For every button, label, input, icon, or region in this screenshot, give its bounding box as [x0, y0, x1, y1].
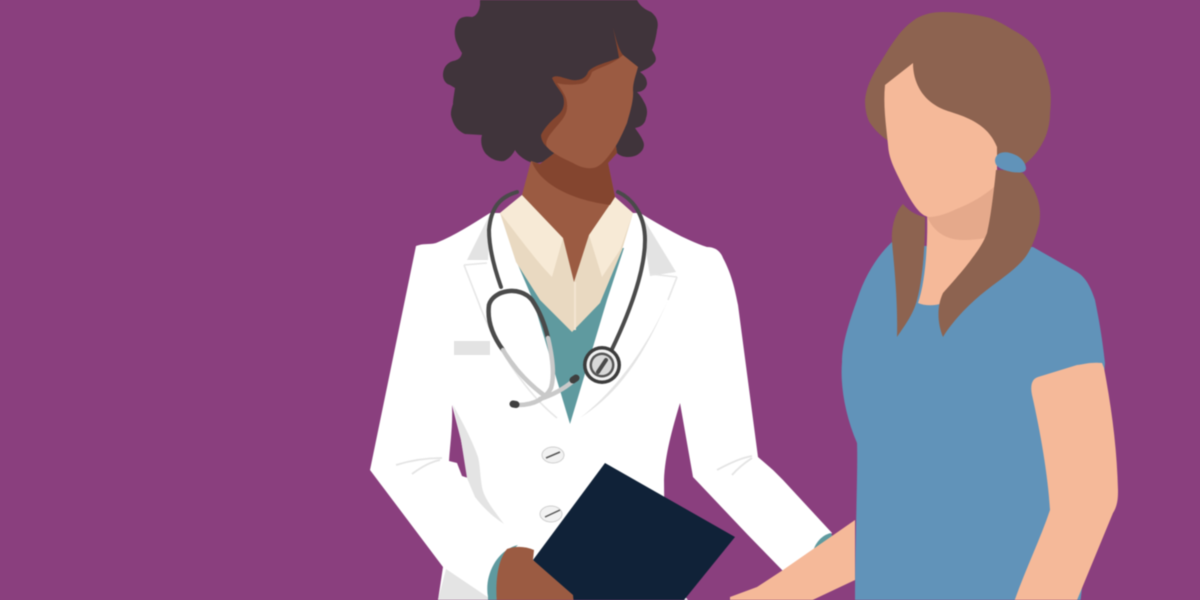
right tube [603, 192, 645, 367]
chest piece [583, 346, 621, 384]
right lapel crescent [580, 300, 668, 418]
loop upper [489, 291, 548, 350]
coat button top [542, 447, 564, 463]
patient ponytail [938, 170, 1040, 337]
left lapel line [464, 263, 557, 418]
right lapel outline [650, 274, 677, 300]
doctor hair [443, 0, 658, 163]
patient far arm [730, 520, 855, 600]
left tube [489, 192, 517, 287]
doctor face [546, 55, 638, 168]
right collar [589, 197, 633, 277]
patient shirt [842, 242, 1105, 600]
patient neck [918, 180, 997, 305]
patient face [884, 63, 997, 217]
doctor hand [496, 547, 574, 600]
coat body [370, 213, 832, 600]
left cuff [487, 545, 518, 600]
right sleeve creases [717, 456, 752, 475]
clipboard [533, 463, 735, 600]
neck shadow [927, 186, 995, 240]
left lapel shadow [467, 214, 490, 260]
coat lower shadow [453, 405, 504, 524]
hair tie [995, 152, 1026, 173]
patient front lock [892, 204, 925, 337]
left sleeve creases [396, 458, 442, 474]
right cuff [813, 533, 833, 551]
shirt placket seam [574, 282, 576, 330]
loop lower light [503, 338, 553, 405]
stethoscope [489, 192, 645, 405]
patient near arm [1013, 363, 1118, 600]
figure: doctor [370, 0, 833, 600]
doctor face shadow [541, 27, 638, 150]
teal scrubs [515, 248, 624, 424]
right lapel shadow [640, 213, 676, 276]
shirt [500, 195, 633, 332]
figure: patient [730, 12, 1118, 600]
ear tips [513, 378, 576, 404]
loop ear branch [540, 381, 573, 399]
coat button bottom [540, 506, 562, 522]
doctor neck [522, 140, 617, 282]
left collar [500, 195, 563, 277]
name badge [454, 341, 490, 355]
neck shadow [532, 140, 617, 205]
coat hem shadow [438, 569, 492, 600]
left arm gap [449, 405, 468, 478]
patient hair back [865, 12, 1051, 164]
